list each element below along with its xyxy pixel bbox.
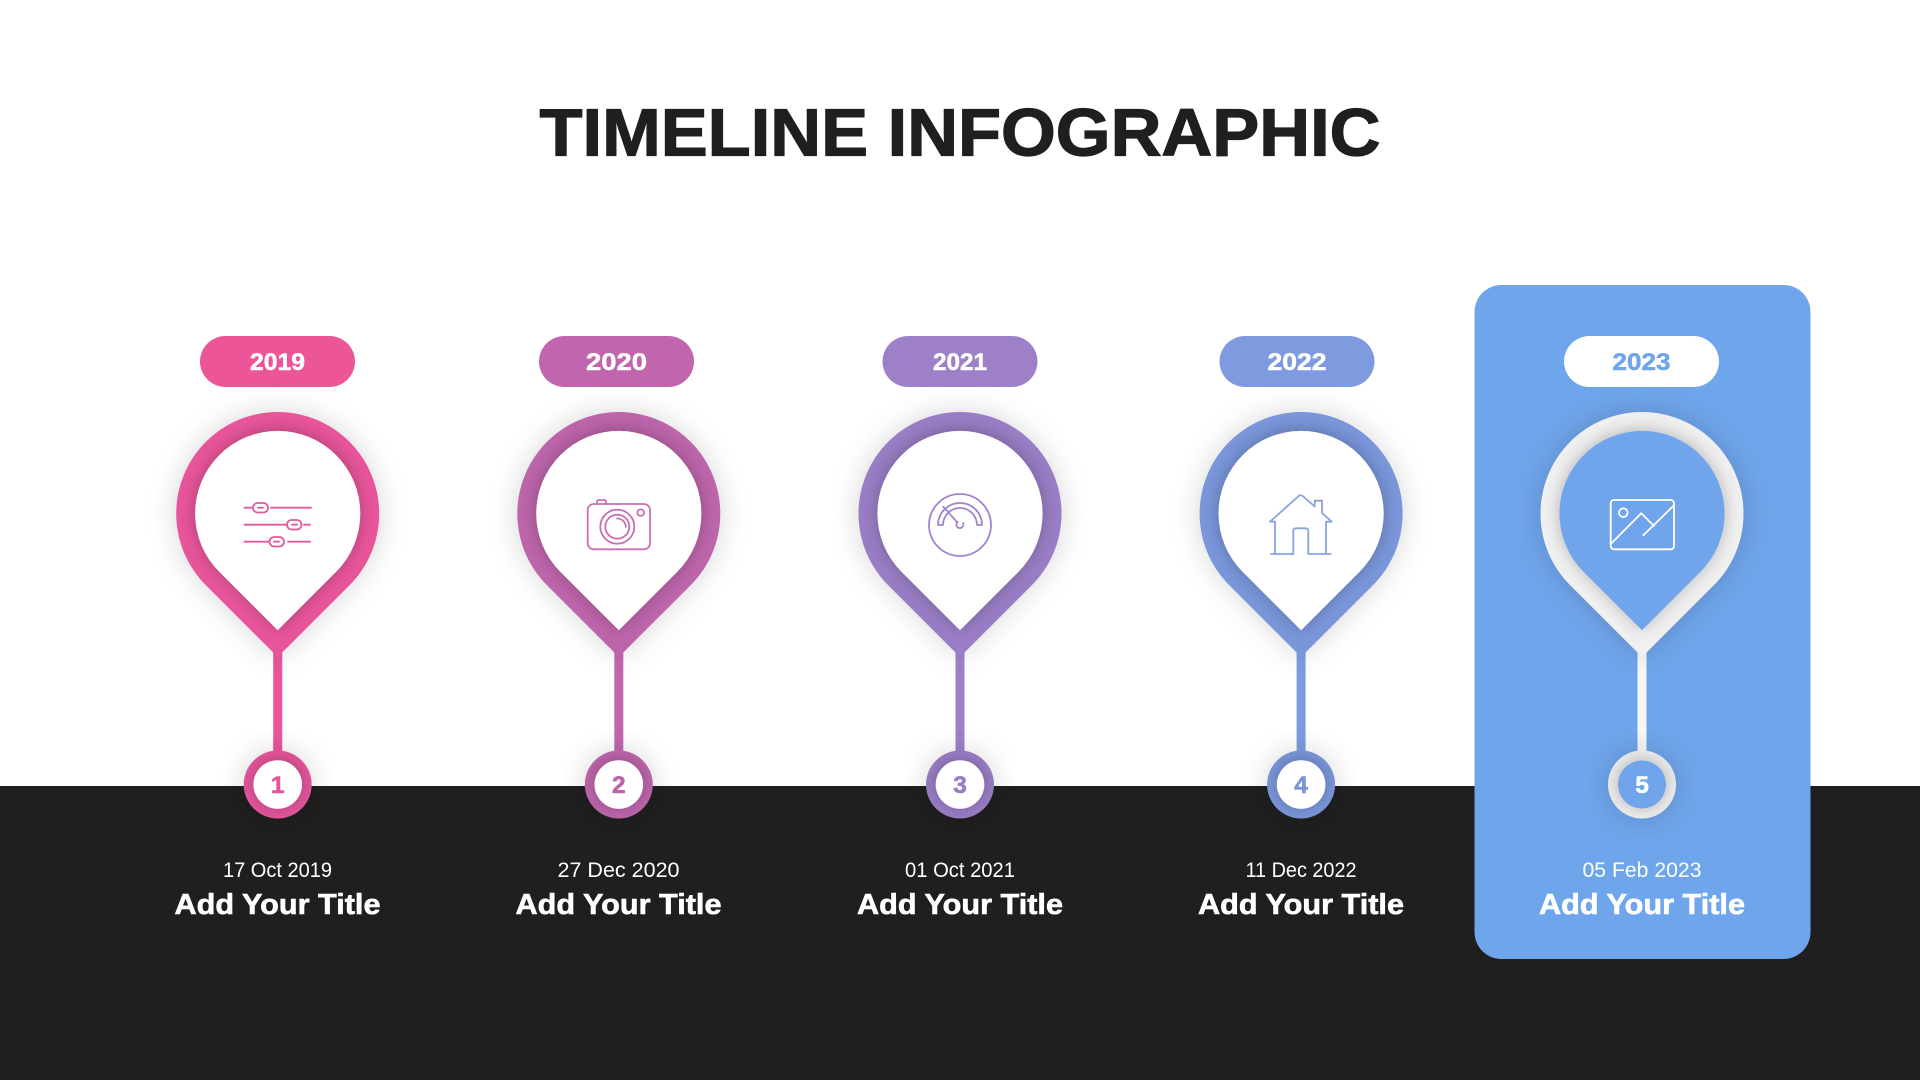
year pill 2020: 2020 [586,349,647,376]
year pill 2023: 2023 [1612,349,1670,376]
number badge 4: 4 [1294,772,1308,799]
icon: camera [588,500,650,549]
dark footer band [0,786,1920,1080]
item title 1: Add Your Title [174,889,380,921]
milestone 1: 2019 [174,336,380,921]
number badge 5: 5 [1635,772,1649,799]
date 2: 27 Dec 2020 [558,859,680,882]
year pill 2022 [1220,336,1374,387]
highlight panel: 2023 [1474,285,1810,959]
year pill 2020 [539,336,694,387]
date 3: 01 Oct 2021 [905,859,1015,882]
year pill 2021 [882,336,1038,387]
location pin 5 [1540,412,1744,657]
number badge 2 [585,750,653,818]
date 1: 17 Oct 2019 [223,859,332,882]
location pin 2 [517,412,720,657]
location pin 4 [1200,412,1403,657]
number badge 1 [244,750,312,818]
icon: sliders [244,503,311,546]
icon: house [1270,495,1332,554]
icon: picture [1611,500,1674,549]
location pin 1 [176,412,379,657]
year pill 2022: 2022 [1268,349,1326,376]
item title 2: Add Your Title [516,889,722,921]
milestone 5: 2023 [1539,336,1745,921]
icon: gauge [929,494,991,556]
connector stem 4 [1297,645,1306,755]
connector stem 1 [273,645,282,755]
year pill 2019 [200,336,355,387]
milestone 4: 2022 [1198,336,1404,921]
connector stem 5 [1638,645,1646,755]
page background [0,0,1920,786]
year pill 2019: 2019 [250,349,305,376]
number badge 2: 2 [612,772,626,799]
connector stem 2 [614,645,623,755]
item title 4: Add Your Title [1198,889,1404,921]
milestone 3: 2021 [857,336,1063,921]
year pill 2021: 2021 [933,349,987,376]
number badge 1: 1 [271,772,285,799]
item title 3: Add Your Title [857,889,1063,921]
location pin 3 [858,412,1062,657]
number badge 3 [926,750,994,818]
number badge 3: 3 [953,772,967,799]
connector stem 3 [956,645,964,755]
milestone 2: 2020 [516,336,722,921]
date 4: 11 Dec 2022 [1246,859,1356,882]
number badge 4 [1267,750,1335,818]
item title 5: Add Your Title [1539,889,1745,921]
number badge 5 [1608,750,1676,818]
date 5: 05 Feb 2023 [1582,859,1702,882]
title: TIMELINE INFOGRAPHIC [540,96,1380,170]
year pill 2023 [1564,336,1719,387]
